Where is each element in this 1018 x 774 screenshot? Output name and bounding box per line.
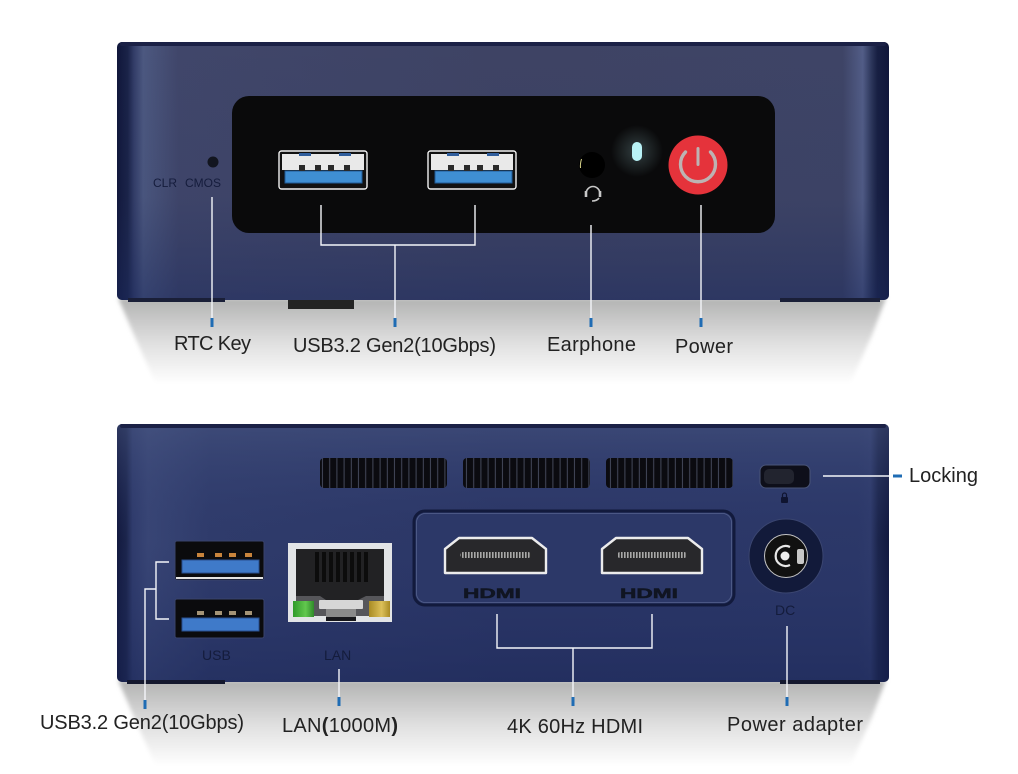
power button bbox=[668, 136, 728, 194]
DC label: DC bbox=[775, 602, 795, 618]
ground shadow bbox=[118, 298, 886, 384]
vent grilles bbox=[320, 458, 733, 488]
CLR CMOS label: CLR bbox=[153, 176, 177, 190]
HDMI port 1 bbox=[445, 538, 546, 573]
HDMI port 2 bbox=[602, 538, 702, 573]
CLR CMOS label bbox=[153, 176, 221, 190]
label: LAN 1000M: LAN(1000M) bbox=[282, 715, 398, 737]
label: Earphone: Earphone bbox=[547, 334, 636, 356]
label: Power adapter: Power adapter bbox=[727, 714, 863, 736]
label: USB3.2 Gen2 rear: USB3.2 Gen2(10Gbps) bbox=[40, 712, 244, 734]
DC jack bbox=[749, 519, 823, 593]
HDMI recess panel bbox=[414, 511, 734, 605]
label: Power: Power bbox=[675, 336, 733, 358]
leader lines bbox=[145, 476, 889, 700]
icon: headset bbox=[586, 187, 600, 201]
label: 4K HDMI: 4K 60Hz HDMI bbox=[507, 716, 643, 738]
device body bbox=[117, 424, 889, 682]
top device: front view bbox=[117, 42, 889, 384]
HDMI logo 2: HDMI bbox=[620, 585, 678, 601]
bottom device: rear view bbox=[40, 424, 978, 766]
lock slot bbox=[760, 465, 810, 488]
label: USB3.2 Gen2: USB3.2 Gen2(10Gbps) bbox=[293, 335, 496, 357]
leader lines bbox=[212, 197, 701, 318]
USB port 1 bbox=[279, 151, 367, 189]
LAN label: LAN bbox=[324, 647, 351, 663]
HDMI logo 1: HDMI bbox=[463, 585, 521, 601]
USB label: USB bbox=[202, 647, 231, 663]
status LED bbox=[611, 125, 663, 177]
label: Locking: Locking bbox=[909, 465, 978, 487]
CMOS pinhole bbox=[208, 156, 218, 168]
label: RTC Key: RTC Key bbox=[174, 333, 251, 355]
LAN port bbox=[288, 543, 392, 622]
device body bbox=[117, 42, 889, 300]
black front panel bbox=[232, 96, 775, 233]
icon: padlock bbox=[781, 493, 788, 503]
USB port 2 bbox=[428, 151, 516, 189]
earphone jack bbox=[579, 152, 605, 178]
ground shadow bbox=[118, 680, 886, 766]
USB port bottom bbox=[175, 599, 264, 638]
CLR CMOS label: CMOS bbox=[185, 176, 221, 190]
USB port top bbox=[175, 541, 264, 580]
